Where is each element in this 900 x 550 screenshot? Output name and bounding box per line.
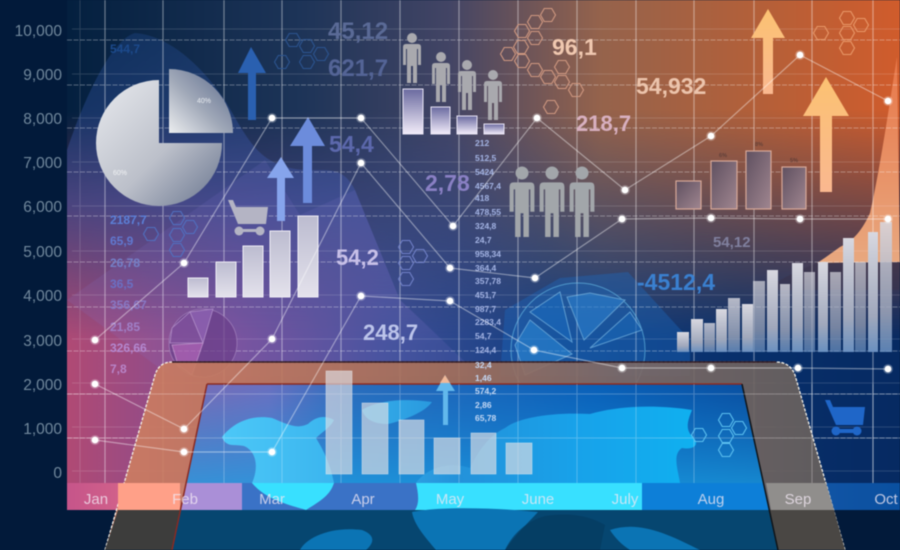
y axis labels: 2,000 <box>23 377 62 394</box>
centre number column: 478,55 <box>475 207 501 217</box>
y axis labels: 8,000 <box>23 111 62 128</box>
outlined bar chart: 5% <box>790 158 798 164</box>
left number column <box>110 42 147 376</box>
people row: three figures <box>510 166 594 237</box>
centre number column: 2283,4 <box>475 317 501 327</box>
left number column: 21,85 <box>110 320 140 334</box>
y axis labels: 3,000 <box>23 333 62 350</box>
centre number column: 512,5 <box>475 153 497 163</box>
centre number column: 124,4 <box>475 345 497 355</box>
large value labels: 248,7 <box>363 320 418 345</box>
large value labels: 218,7 <box>576 111 631 136</box>
orange up arrow, back <box>751 9 785 94</box>
month labels: Jan <box>84 491 108 508</box>
large value labels: 54,932 <box>636 73 706 99</box>
large value labels: -4512,4 <box>637 269 715 295</box>
y axis labels: 9,000 <box>23 67 62 84</box>
large value labels: 96,1 <box>552 34 597 60</box>
blue shopping cart icon <box>825 400 865 436</box>
y axis labels: 5,000 <box>23 244 62 261</box>
centre number column: 212 <box>475 138 489 148</box>
month labels: Mar <box>259 491 285 508</box>
tablet screen with world map <box>170 384 780 550</box>
shopping cart icon <box>228 200 268 236</box>
screen bar chart <box>326 371 532 474</box>
left number column: 326,66 <box>110 341 147 355</box>
centre number column: 958,34 <box>475 249 501 259</box>
blue up arrow <box>238 47 266 120</box>
large value labels: 54,12 <box>713 234 751 251</box>
month labels: Oct <box>874 491 898 508</box>
bar chart: rising white bars <box>188 216 318 297</box>
hexagon clusters <box>144 8 868 286</box>
left number column: 7,8 <box>110 362 127 376</box>
small screen arrow <box>436 375 455 425</box>
large value labels: 45,12 <box>328 18 388 45</box>
centre number column: 5424 <box>475 167 494 177</box>
light blue up arrow <box>267 157 294 221</box>
large value labels: 54,4 <box>329 131 374 157</box>
large value labels: 54,2 <box>336 245 379 270</box>
people row: four figures <box>403 33 502 120</box>
large value labels: 621,7 <box>328 55 388 82</box>
month labels: Apr <box>351 491 375 508</box>
month labels: Feb <box>172 491 198 508</box>
number column over screen <box>475 360 497 423</box>
y axis labels: 10,000 <box>15 23 62 40</box>
y axis labels: 4,000 <box>23 288 62 305</box>
pie chart: 60 / 40 split <box>96 69 233 206</box>
large periwinkle up arrow <box>290 117 325 203</box>
number column over screen: 1,46 <box>475 373 492 383</box>
y axis labels: 1,000 <box>23 421 62 438</box>
centre number column: 357,78 <box>475 276 501 286</box>
outlined bar chart: 6% <box>719 153 727 159</box>
centre number column <box>475 138 501 355</box>
month labels: May <box>436 491 465 508</box>
y axis labels: 7,000 <box>23 155 62 172</box>
hexagons on screen <box>692 414 746 456</box>
y axis labels: 6,000 <box>23 199 62 216</box>
large blue pie chart <box>511 283 645 417</box>
left number column: 356,67 <box>110 298 147 312</box>
pie chart: 60 / 40 split: 60% <box>113 170 127 177</box>
small purple pie chart <box>169 309 237 377</box>
month labels: Aug <box>698 491 724 508</box>
y axis labels: 0 <box>53 465 62 482</box>
y axis labels <box>15 23 62 482</box>
left number column: 36,5 <box>110 277 134 291</box>
left number column: 65,9 <box>110 234 134 248</box>
number column over screen: 574,2 <box>475 386 497 396</box>
month labels: July <box>612 491 639 508</box>
centre number column: 4567,4 <box>475 181 501 191</box>
bars under the people <box>403 89 504 134</box>
histogram bars <box>677 222 892 352</box>
left number column: 26,78 <box>110 256 140 270</box>
orange up arrow, front <box>803 77 849 192</box>
left number column: 2187,7 <box>110 213 147 227</box>
centre number column: 24,7 <box>475 235 492 245</box>
outlined bar chart <box>676 142 806 209</box>
large value labels: 2,78 <box>425 170 470 196</box>
line series with data points <box>92 52 891 455</box>
tablet frame <box>105 362 845 550</box>
centre number column: 987,7 <box>475 304 497 314</box>
month labels <box>84 491 898 508</box>
month labels: June <box>522 491 554 508</box>
number column over screen: 2,86 <box>475 400 492 410</box>
left number column: 544,7 <box>110 42 140 56</box>
centre number column: 54,7 <box>475 331 492 341</box>
month labels: Sep <box>785 491 811 508</box>
centre number column: 418 <box>475 193 489 203</box>
large value labels <box>328 18 751 345</box>
pie chart: 60 / 40 split: 40% <box>197 98 211 105</box>
number column over screen: 65,78 <box>475 413 497 423</box>
screen grid lines <box>67 384 900 483</box>
number column over screen: 32,4 <box>475 360 492 370</box>
centre number column: 364,4 <box>475 263 497 273</box>
outlined bar chart: 8% <box>755 142 763 148</box>
centre number column: 451,7 <box>475 290 497 300</box>
centre number column: 324,8 <box>475 221 497 231</box>
